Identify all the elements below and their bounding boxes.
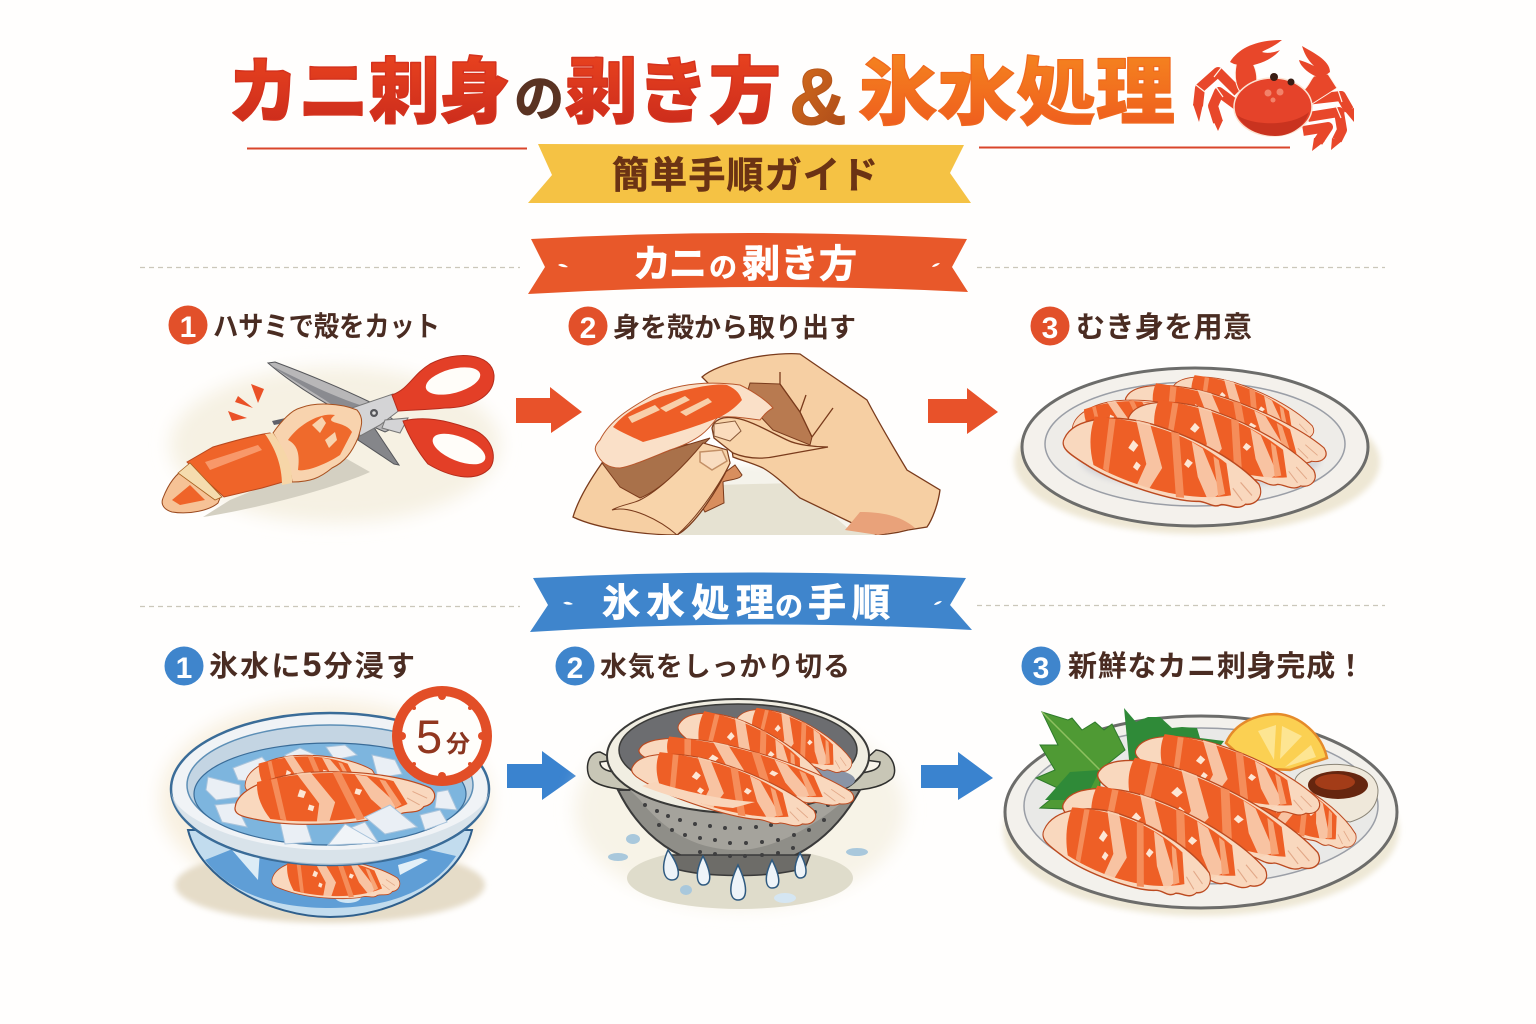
icon: 5 minute timer [392,686,492,786]
section line dashed top [140,268,1385,606]
title: & [789,52,847,141]
banner: peeling section: の [709,252,737,283]
title: 氷水処理 [858,51,1175,134]
arrow: step 2 to 3 [928,388,998,434]
arrow: soak to drain [507,751,576,800]
illustration: colander [575,699,905,909]
banner: ice water section: 氷水処理 [602,583,774,625]
step label: drain: 水気をしっかり切る [600,652,850,682]
illustration: ice water bowl [160,700,490,923]
banner: peeling section: カニ [633,244,707,286]
banner: peeling section: 剥き方 [742,244,857,286]
step label: cut shell: ハサミで殻をカット [213,311,440,342]
step label: take out meat [568,306,856,346]
step label: prepare meat: むき身を用意 [1076,311,1252,344]
step label: soak: 1 [176,652,192,685]
step label: take out meat: 身を殻から取り出す [613,313,856,343]
icon: 5 minute timer: 5 [416,710,442,763]
title [228,51,1175,141]
banner: ice water section: 手順 [808,583,890,625]
step label: drain [556,646,850,686]
title: 剥き方 [565,53,781,133]
step label: drain: 2 [567,652,583,685]
banner: peeling section [528,233,968,294]
step label: prepare meat: 3 [1042,312,1058,345]
title: カニ刺身 [228,53,510,133]
icon: 5 minute timer: 分 [446,731,470,758]
arrow: step 1 to 2 [516,387,582,433]
step label: take out meat: 2 [580,312,596,345]
step label: soak: 氷水に5分浸す [209,646,415,684]
illustration: hands taking out meat [560,354,960,543]
banner: guide: 簡単手順ガイド [612,155,878,196]
icon: crab [1193,40,1354,151]
arrow: drain to finished [921,752,993,800]
step label: prepare meat [1030,306,1252,346]
step label: finished: 新鮮なカニ刺身完成！ [1068,650,1365,683]
banner: ice water section: の [775,591,803,622]
illustration: finished sashimi plate [1003,708,1399,916]
banner: ice water section [530,572,972,632]
illustration: scissors cutting crab leg [162,355,500,523]
step label: cut shell [168,306,440,344]
step label: finished: 3 [1033,652,1049,685]
step label: cut shell: 1 [180,311,196,344]
illustration: plate of peeled meat [1014,366,1380,534]
divider lines [247,148,1290,149]
banner: guide [528,144,971,203]
title: の [514,71,564,127]
